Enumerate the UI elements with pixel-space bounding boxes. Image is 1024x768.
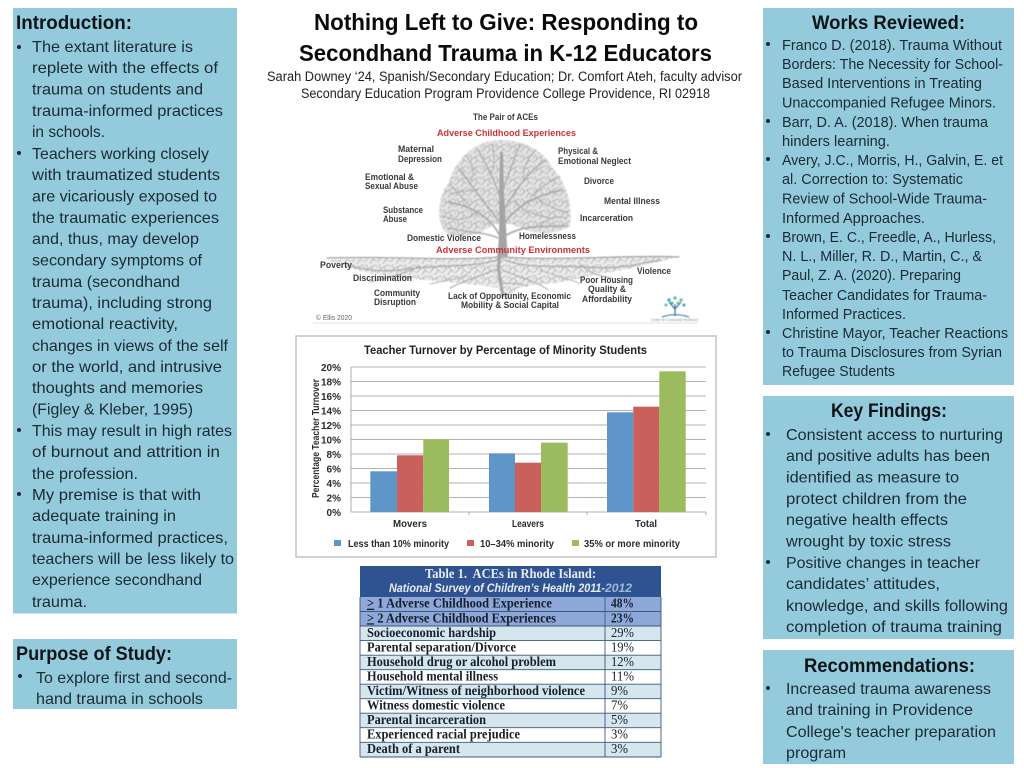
text block: introduction bullets: secondary symptoms of bbox=[32, 253, 203, 270]
root labels: community environments: Community bbox=[374, 288, 420, 298]
table rows bbox=[367, 596, 634, 756]
authors and affiliation bbox=[267, 69, 742, 101]
tree labels: childhood experiences: Divorce bbox=[584, 176, 614, 186]
y axis labels: 12% bbox=[321, 421, 341, 432]
text block: findings bullets: wrought by toxic stress bbox=[785, 534, 951, 551]
text block: purpose bullet: To explore first and second- bbox=[36, 670, 232, 687]
text block: introduction bullets: My premise is that with bbox=[32, 487, 201, 504]
text block: introduction bullets: teachers will be less likely to bbox=[32, 551, 234, 568]
text block: findings bullets: identified as measure to bbox=[786, 470, 959, 487]
text block: findings bullets: negative health effects bbox=[786, 512, 948, 529]
table rows: Parental separation/Divorce bbox=[367, 639, 516, 654]
text block: introduction bullets: trauma on students and bbox=[32, 82, 203, 99]
table header: 2012 bbox=[604, 581, 632, 595]
heading: introduction: Introduction: bbox=[16, 13, 132, 34]
table rows: 19% bbox=[611, 639, 634, 654]
heading: purpose of study: Purpose of Study: bbox=[16, 644, 172, 665]
text block: recommendation bullet bbox=[766, 681, 996, 762]
text block: findings bullets: and positive adults has been bbox=[786, 448, 990, 465]
y axis labels: 18% bbox=[321, 378, 341, 388]
heading: recommendations: Recommendations: bbox=[804, 656, 975, 677]
tree labels: childhood experiences: Domestic Violence bbox=[407, 233, 481, 243]
icon: community resilience logo bbox=[651, 296, 698, 322]
root labels: community environments: Lack of Opportunity, Economic bbox=[448, 291, 571, 301]
text block: references: Barr, D. A. (2018). When trauma bbox=[782, 115, 988, 131]
text block: introduction bullets: in schools. bbox=[32, 124, 105, 141]
table rows: Death of a parent bbox=[367, 741, 460, 756]
y axis labels: 16% bbox=[321, 392, 341, 403]
text block: references: Unaccompanied Refugee Minors. bbox=[782, 96, 996, 112]
text block: findings bullets: candidates’ attitudes, bbox=[786, 576, 940, 593]
text block: references: Informed Approaches. bbox=[782, 211, 925, 227]
y axis labels bbox=[321, 363, 341, 519]
table rows: Socioeconomic hardship bbox=[367, 625, 496, 640]
text block: references: to Trauma Disclosures from Syrian bbox=[782, 345, 1002, 361]
tree labels: childhood experiences: Depression bbox=[398, 154, 442, 164]
icon: community resilience logo: Center for Community Resilience bbox=[651, 318, 698, 322]
text block: introduction bullets: Teachers working closely bbox=[32, 146, 209, 163]
text block: introduction bullets: emotional reactivity, bbox=[32, 316, 178, 333]
text block: references bbox=[766, 38, 1008, 380]
root labels: community environments: Affordability bbox=[582, 294, 632, 304]
category labels: Total bbox=[635, 518, 657, 530]
text block: references: Informed Practices. bbox=[782, 307, 906, 323]
table header: National Survey of Children’s Health 2011- bbox=[389, 581, 605, 595]
y axis labels: 4% bbox=[327, 479, 341, 490]
table rows: 11% bbox=[611, 668, 634, 684]
heading: key findings: Key Findings: bbox=[831, 401, 947, 422]
panel: works reviewed bbox=[763, 8, 1014, 385]
tree labels: childhood experiences: Emotional & bbox=[365, 172, 414, 182]
table rows: 9% bbox=[611, 683, 628, 698]
text block: introduction bullets: with traumatized students bbox=[31, 167, 220, 184]
legend: 35% or more minority bbox=[584, 538, 680, 550]
tree labels: childhood experiences: Maternal bbox=[398, 144, 434, 154]
table: ACEs in Rhode Island bbox=[360, 566, 661, 757]
text block: introduction bullets: of burnout and attrition in bbox=[32, 444, 220, 461]
root labels: community environments: Discrimination bbox=[353, 273, 412, 283]
table rows: 3% bbox=[611, 741, 628, 756]
figure: pair of ACEs tree bbox=[313, 112, 698, 323]
text block: references: N. L., Miller, R. D., Martin, C., & bbox=[782, 249, 982, 265]
bar chart: teacher turnover bbox=[296, 336, 716, 557]
table rows: Household drug or alcohol problem bbox=[367, 654, 557, 669]
text block: references: hinders learning. bbox=[782, 134, 890, 150]
root labels: community environments: Quality & bbox=[588, 284, 626, 294]
y axis labels: 8% bbox=[327, 450, 341, 461]
root labels: community environments bbox=[320, 260, 671, 310]
table header: Table 1. ACEs in Rhode Island: bbox=[425, 566, 596, 581]
tree labels: childhood experiences: Sexual Abuse bbox=[365, 181, 418, 191]
y axis title: Percentage Teacher Turnover bbox=[310, 379, 322, 498]
y axis labels: 14% bbox=[321, 406, 341, 418]
table rows: Household mental illness bbox=[367, 668, 498, 684]
panel: recommendations bbox=[763, 650, 1014, 764]
text block: references: Franco D. (2018). Trauma Without bbox=[782, 38, 1002, 54]
text block: introduction bullets: are vicariously exposed to bbox=[32, 189, 217, 206]
title bbox=[299, 9, 712, 66]
authors and affiliation: Sarah Downey ‘24, Spanish/Secondary Education; Dr. Comfort Ateh, faculty advisor bbox=[267, 69, 742, 84]
category labels: Leavers bbox=[512, 518, 544, 530]
text block: introduction bullets: The extant literature is bbox=[32, 39, 193, 56]
text block: references: al. Correction to: Systematic bbox=[782, 172, 963, 188]
text block: introduction bullets: experience secondhand bbox=[32, 572, 202, 589]
red heading: adverse community environments: Adverse Community Environments bbox=[436, 245, 590, 256]
bars: leavers bbox=[489, 443, 568, 512]
tree labels: childhood experiences bbox=[365, 144, 660, 243]
text block: references: Borders: The Necessity for School- bbox=[782, 57, 1003, 73]
text block: purpose bullet bbox=[18, 670, 232, 708]
heading: works reviewed: Works Reviewed: bbox=[812, 13, 965, 34]
category labels: Movers bbox=[393, 518, 427, 530]
y axis labels: 0% bbox=[327, 508, 341, 519]
tree labels: childhood experiences: Substance bbox=[383, 205, 423, 215]
root labels: community environments: Disruption bbox=[374, 297, 416, 307]
table rows: 48% bbox=[611, 596, 634, 611]
figure title: The Pair of ACEs bbox=[473, 112, 538, 122]
root labels: community environments: Poverty bbox=[320, 260, 352, 270]
text block: introduction bullets: trauma (secondhand bbox=[32, 274, 180, 291]
tree labels: childhood experiences: Incarceration bbox=[580, 213, 633, 223]
copyright: © Ellis 2020 bbox=[316, 314, 352, 322]
table rows: 7% bbox=[611, 698, 628, 713]
text block: recommendation bullet: program bbox=[786, 745, 846, 762]
panel: introduction bbox=[13, 8, 237, 614]
title: Nothing Left to Give: Responding to bbox=[314, 9, 698, 35]
text block: references: Brown, E. C., Freedle, A., Hurless, bbox=[782, 230, 996, 246]
text block: references: Paul, Z. A. (2020). Preparing bbox=[782, 268, 961, 284]
table rows: 29% bbox=[611, 625, 634, 640]
tree labels: childhood experiences: Abuse bbox=[383, 214, 407, 224]
table rows: Parental incarceration bbox=[367, 712, 486, 727]
text block: introduction bullets: changes in views of the self bbox=[32, 338, 229, 355]
y axis labels: 2% bbox=[327, 494, 341, 504]
table rows: 23% bbox=[611, 610, 634, 625]
text block: introduction bullets: thoughts and memories bbox=[32, 380, 203, 397]
legend bbox=[334, 538, 680, 550]
authors and affiliation: Secondary Education Program Providence College Providence, RI 02918 bbox=[301, 86, 710, 101]
chart title: Teacher Turnover by Percentage of Minority Students bbox=[364, 343, 647, 357]
text block: findings bullets: completion of trauma training bbox=[786, 619, 1002, 636]
text block: references: Based Interventions in Treating bbox=[782, 76, 982, 92]
category labels bbox=[393, 518, 657, 530]
text block: introduction bullets: adequate training in bbox=[32, 508, 176, 525]
red heading: adverse childhood experiences: Adverse Childhood Experiences bbox=[437, 128, 576, 139]
table header bbox=[360, 566, 661, 597]
bars: total bbox=[607, 371, 686, 512]
text block: references: Teacher Candidates for Trauma- bbox=[782, 288, 987, 304]
text block: introduction bullets: the traumatic experiences bbox=[32, 210, 219, 227]
text block: references: Avery, J.C., Morris, H., Galvin, E. et bbox=[782, 153, 1003, 169]
text block: findings bullets: protect children from the bbox=[786, 491, 967, 508]
text block: findings bullets: Consistent access to nurturing bbox=[786, 427, 1003, 444]
text block: purpose bullet: hand trauma in schools bbox=[36, 691, 203, 708]
text block: recommendation bullet: College's teacher preparation bbox=[786, 724, 996, 741]
tree illustration bbox=[327, 140, 679, 300]
tree labels: childhood experiences: Emotional Neglect bbox=[558, 156, 631, 166]
text block: findings bullets: knowledge, and skills following bbox=[786, 598, 1008, 615]
table rows: Victim/Witness of neighborhood violence bbox=[367, 683, 585, 698]
text block: recommendation bullet: and training in Providence bbox=[786, 702, 973, 719]
root labels: community environments: Violence bbox=[637, 266, 671, 276]
y axis labels: 20% bbox=[321, 363, 341, 374]
table rows: > 1 Adverse Childhood Experience bbox=[367, 596, 552, 611]
table rows: > 2 Adverse Childhood Experiences bbox=[367, 610, 556, 625]
table rows: 3% bbox=[611, 727, 628, 742]
panel: purpose of study bbox=[13, 639, 237, 709]
text block: introduction bullets: This may result in high rates bbox=[32, 423, 232, 440]
text block: introduction bullets: replete with the effects of bbox=[32, 60, 219, 77]
text block: introduction bullets: trauma-informed practices, bbox=[32, 530, 228, 547]
text block: findings bullets: Positive changes in teacher bbox=[786, 555, 981, 572]
text block: introduction bullets: (Figley & Kleber, 1995) bbox=[32, 402, 193, 419]
table rows: 12% bbox=[611, 654, 634, 669]
legend: Less than 10% minority bbox=[348, 538, 449, 550]
text block: references: Refugee Students bbox=[782, 364, 895, 380]
legend: 10–34% minority bbox=[480, 538, 554, 550]
tree labels: childhood experiences: Mental Illness bbox=[604, 196, 660, 206]
title: Secondhand Trauma in K-12 Educators bbox=[299, 40, 712, 66]
tree labels: childhood experiences: Physical & bbox=[558, 146, 598, 156]
text block: references: Christine Mayor, Teacher Reactions bbox=[782, 326, 1008, 342]
text block: introduction bullets: the profession. bbox=[32, 466, 138, 483]
text block: findings bullets bbox=[766, 427, 1008, 636]
root labels: community environments: Mobility & Social Capital bbox=[461, 300, 559, 310]
text block: introduction bullets: trauma), including strong bbox=[32, 295, 212, 312]
table rows: Experienced racial prejudice bbox=[367, 727, 520, 742]
text block: introduction bullets bbox=[17, 39, 234, 611]
y axis labels: 10% bbox=[321, 436, 341, 446]
text block: introduction bullets: or the world, and intrusive bbox=[32, 359, 222, 376]
tree labels: childhood experiences: Homelessness bbox=[519, 231, 576, 241]
table rows: Witness domestic violence bbox=[367, 698, 505, 713]
bars: movers bbox=[370, 439, 449, 512]
text block: introduction bullets: and, thus, may develop bbox=[32, 231, 199, 248]
root labels: community environments: Poor Housing bbox=[580, 275, 633, 285]
table rows: 5% bbox=[611, 712, 628, 727]
text block: introduction bullets: trauma. bbox=[32, 594, 87, 611]
y axis labels: 6% bbox=[327, 464, 341, 476]
text block: references: Review of School-Wide Trauma- bbox=[782, 192, 987, 208]
panel: key findings bbox=[763, 396, 1014, 639]
text block: recommendation bullet: Increased trauma awareness bbox=[786, 681, 991, 698]
text block: introduction bullets: trauma-informed practices bbox=[32, 103, 223, 120]
